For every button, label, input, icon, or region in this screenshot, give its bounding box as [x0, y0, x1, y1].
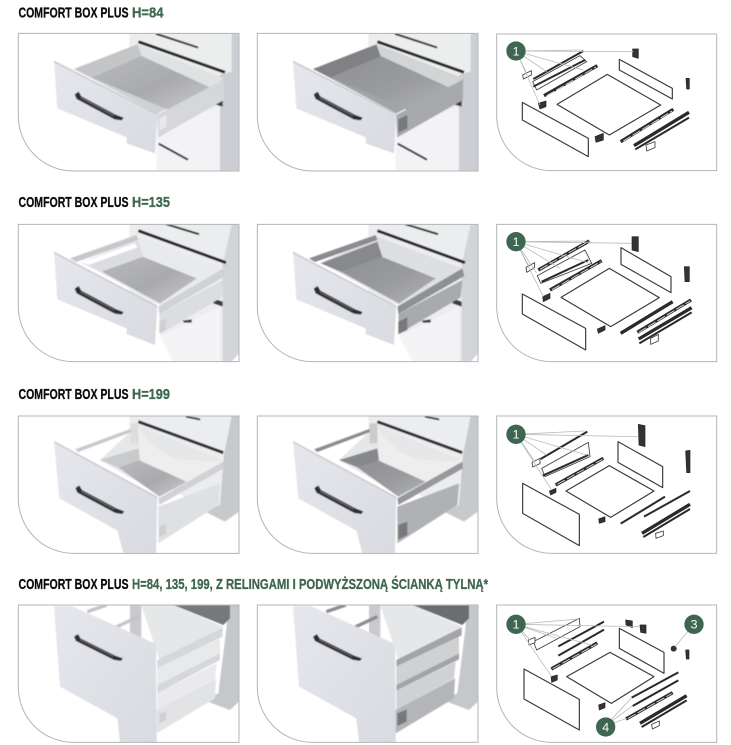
panel: H=135 drawer, light — [18, 224, 239, 362]
back panel — [621, 248, 671, 293]
badge 1: 1 — [513, 44, 520, 58]
panel: H=84 drawer, dark — [257, 33, 478, 171]
front panel — [522, 102, 588, 157]
badge 3 — [684, 615, 704, 634]
base board — [567, 652, 654, 703]
base board — [566, 466, 654, 517]
badge 1 — [506, 41, 526, 61]
drawer rails — [533, 51, 689, 151]
heading: H=135: H=135 — [132, 195, 170, 211]
badge 1: 1 — [513, 428, 520, 442]
panel: H=135 exploded parts — [497, 224, 717, 362]
heading: with rails and raised back wall — [18, 575, 488, 593]
heading: with rails and raised back wall: H=84, 135, 199, Z RELINGAMI I PODWYŻSZONĄ ŚCIANKĄ TYLNĄ* — [132, 575, 488, 593]
heading: H=199: H=199 — [132, 387, 170, 403]
badge 4: 4 — [602, 720, 609, 734]
small fittings — [528, 620, 689, 710]
heading: with rails and raised back wall: COMFORT BOX PLUS — [18, 577, 129, 593]
panel: railed drawer exploded parts — [497, 605, 717, 742]
panel: H=199 exploded parts — [497, 416, 717, 553]
small fittings — [532, 424, 690, 523]
badge 1 — [506, 232, 526, 251]
drawer rails — [537, 241, 692, 344]
panel: railed drawer, dark — [257, 605, 478, 742]
drawer rails — [533, 618, 687, 729]
callout lines — [516, 619, 694, 726]
front panel — [522, 294, 586, 350]
back panel — [619, 59, 672, 99]
heading: H=199: COMFORT BOX PLUS — [18, 387, 129, 403]
badge 4 — [596, 717, 615, 737]
back panel — [618, 442, 663, 488]
back panel — [619, 628, 664, 673]
callout lines — [516, 50, 633, 105]
small fittings — [523, 49, 689, 142]
panel: H=84 drawer, light — [18, 33, 239, 171]
front panel — [524, 669, 579, 730]
badge 1: 1 — [513, 618, 520, 632]
panel: H=199 drawer, dark — [257, 416, 478, 553]
base board — [557, 74, 661, 135]
callout lines — [516, 431, 638, 490]
badge 3: 3 — [691, 618, 698, 632]
small fittings — [526, 237, 689, 333]
callout lines — [516, 241, 632, 297]
badge 1: 1 — [513, 235, 520, 249]
badge 1 — [506, 615, 526, 634]
heading: H=135: COMFORT BOX PLUS — [18, 195, 129, 211]
drawer rails — [541, 432, 690, 538]
panel: H=135 drawer, dark — [257, 224, 478, 362]
panel: H=199 drawer, light — [18, 416, 239, 553]
base board — [561, 268, 659, 327]
heading: H=84: COMFORT BOX PLUS — [18, 6, 129, 22]
heading: H=84: H=84 — [132, 6, 164, 22]
panel: railed drawer, light — [18, 605, 239, 742]
front panel — [523, 483, 579, 546]
panel: H=84 exploded parts — [497, 34, 717, 171]
badge 1 — [506, 425, 526, 444]
